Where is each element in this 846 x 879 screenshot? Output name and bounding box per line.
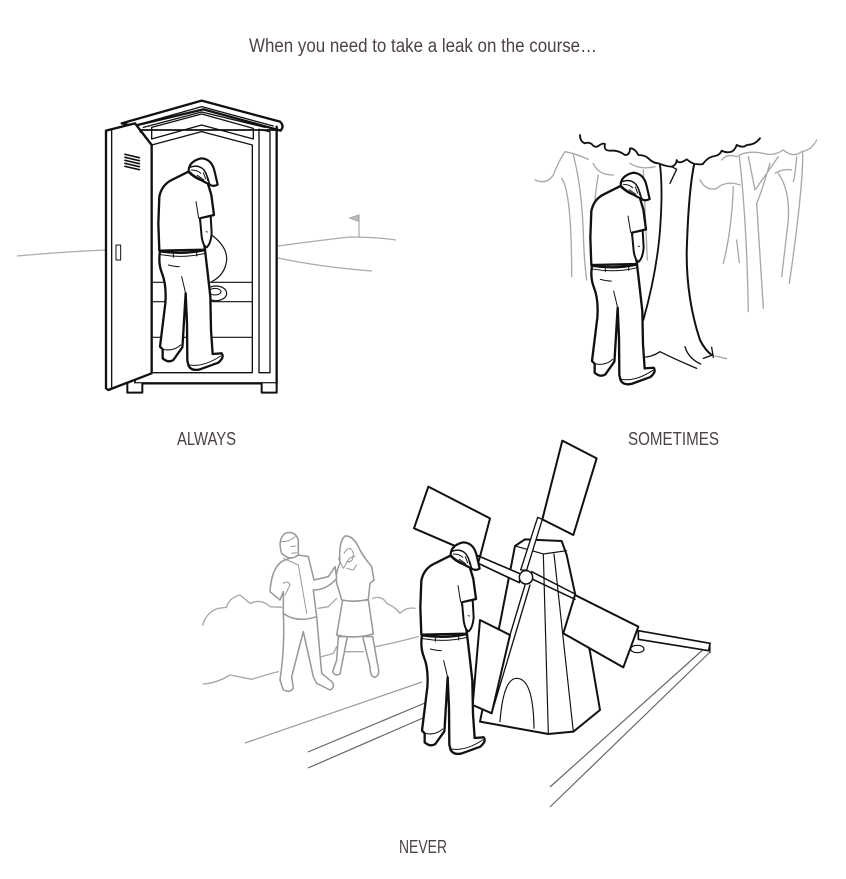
woman bbox=[333, 536, 379, 677]
scene: portable toilet (always) bbox=[17, 101, 396, 393]
label: never: NEVER bbox=[399, 837, 447, 857]
hedge bbox=[203, 595, 418, 684]
man bbox=[270, 532, 337, 691]
fairway edges bbox=[245, 647, 710, 807]
label: sometimes: SOMETIMES bbox=[628, 429, 719, 449]
scene: tree (sometimes) bbox=[535, 135, 817, 384]
tree and background forest bbox=[535, 135, 817, 368]
portable toilet bbox=[106, 101, 283, 393]
golfer bbox=[158, 158, 223, 370]
windmill bbox=[414, 441, 710, 734]
scene: onlookers (never) bbox=[203, 532, 418, 691]
golf course horizon bbox=[17, 215, 396, 271]
golfer bbox=[420, 542, 485, 754]
label: always: ALWAYS bbox=[177, 429, 236, 449]
scene: windmill (never) bbox=[245, 441, 710, 807]
golfer bbox=[590, 173, 655, 384]
title: When you need to take a leak on the course… bbox=[249, 36, 597, 57]
